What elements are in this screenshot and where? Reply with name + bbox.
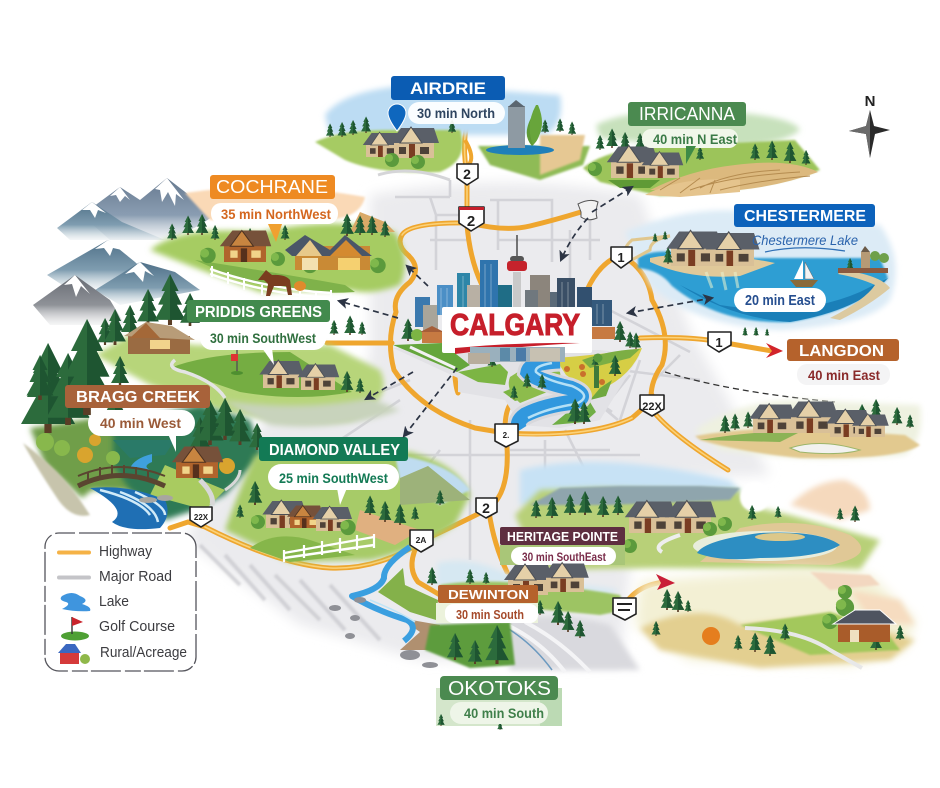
label: Langdon [787,339,899,361]
shield: 2 centre [495,424,518,447]
time: 30 min SouthEast [511,547,616,565]
shield: highway 1 east [708,332,731,352]
icon: horse [258,270,292,296]
time: 30 min South [436,603,538,623]
shield: unreadable [613,598,636,620]
Calgary banner [442,307,592,354]
shield: 2 south: 2 [482,500,490,516]
fence [210,266,332,300]
panel: Bragg Creek scene [21,319,265,529]
river and ground [329,547,640,672]
panel: Diamond Valley [225,437,470,562]
legend: lake: Lake [99,593,129,610]
time: 35 min NorthWest: 35 min NorthWest [221,207,331,222]
lake name: Chestermere Lake [752,232,858,248]
bridge [78,465,165,486]
shield: 22X west: 22X [194,513,209,522]
time: 30 min SouthWest [200,325,326,365]
shield: highway 1 east: 1 [715,335,723,350]
shield: highway 1 north [611,247,632,268]
shield: 2 centre: 2. [503,431,509,440]
label: Airdrie [391,76,505,100]
label: Irricanna: IRRICANNA [639,104,735,124]
lake scene [625,210,896,336]
hill scene [150,187,405,293]
icon: map pin [388,104,406,131]
road shields [190,164,731,620]
legend: major road: Major Road [99,568,172,585]
highways [170,125,772,600]
label: Airdrie: AIRDRIE [410,79,486,98]
legend: highway: Highway [99,543,152,560]
legend: golf course [61,617,175,640]
legend: rural: Rural/Acreage [100,644,187,661]
compass: N [865,93,875,110]
crop background [436,688,562,730]
scene [225,449,470,562]
legend [45,533,196,671]
legend: golf course: Golf Course [99,618,175,635]
small buildings [420,326,615,343]
time: 20 min East [734,288,826,312]
chicken/pony [294,281,306,291]
shield: 2A: 2A [416,535,426,545]
label: Okotoks: OKOTOKS [448,678,551,700]
time: 20 min East: 20 min East [745,293,815,309]
city centre: Calgary [393,235,642,430]
sky and scene [315,85,590,180]
shield: highway 2: 2 [467,213,475,230]
panel: Cochrane [33,175,405,325]
panel: Bragg Creek forest and Priddis [21,274,400,529]
arrow: to Langdon [766,343,783,358]
time: 30 min North [408,102,505,124]
panel: Langdon [665,339,921,459]
shield: 22X east [640,395,664,416]
label: Chestermere: CHESTERMERE [744,208,866,225]
shield: highway 1 north: 1 [617,250,625,265]
panel: southeast rural scene [635,568,915,668]
orange tree [702,627,720,645]
compass [849,93,890,158]
shield: highway 2 north: 2 [463,166,471,182]
scene [583,110,820,197]
label: Langdon: LANGDON [799,343,884,360]
time: 30 min SouthWest: 30 min SouthWest [210,331,316,346]
time: 40 min West: 40 min West [100,415,181,431]
dashed arrows [339,187,712,436]
panel: Airdrie [315,76,590,180]
house [833,610,896,642]
time: 40 min East [797,364,890,385]
shield: 2A [410,530,433,552]
dashed connector [665,372,835,402]
building strip [468,347,565,364]
panel: Priddis Greens scene [95,274,400,427]
panel: Dewinton [329,547,640,672]
label: Cochrane: COCHRANE [216,177,328,197]
label: Diamond Valley [259,437,408,461]
shield: 22X east: 22X [642,401,662,413]
panel: Okotoks [436,676,562,730]
panel: Irricanna [583,102,820,197]
Calgary Tower [507,235,527,310]
legend: highway [59,543,152,560]
label background crop [500,545,625,565]
time: 25 min SouthWest: 25 min SouthWest [279,470,388,486]
label: Diamond Valley: DIAMOND VALLEY [269,442,400,459]
panel: Heritage Pointe [500,462,880,570]
skyline [415,235,612,331]
time: 30 min North: 30 min North [417,105,495,121]
label: Heritage Pointe: HERITAGE POINTE [507,529,618,544]
legend: major road [59,568,172,585]
scene [695,399,921,459]
time: 25 min SouthWest [268,464,399,505]
scene [515,462,880,570]
icon: golf flag [231,350,243,375]
label: Chestermere [734,204,875,227]
shield: 2 south [476,498,497,518]
base map [185,180,770,665]
mountains [33,178,215,325]
label: Dewinton: DEWINTON [448,587,529,602]
shield: highway 2 [459,207,484,231]
time: 40 min N East: 40 min N East [653,132,737,147]
Calgary banner: CALGARY [450,307,580,342]
legend: lake [61,593,129,611]
time: 30 min South: 30 min South [456,608,524,622]
fence [284,534,374,562]
label: Priddis Greens: PRIDDIS GREENS [195,304,322,321]
shield: 22X west [190,507,212,527]
time: 40 min N East [642,129,738,164]
time: 30 min SouthEast: 30 min SouthEast [522,550,606,564]
shield: highway 2 north [457,164,478,185]
label: Bragg Creek [65,385,210,408]
panel: Chestermere [625,204,896,336]
legend: rural [58,644,187,664]
time: 40 min South: 40 min South [464,706,544,721]
central green park [393,318,642,430]
label: Dewinton [438,585,538,603]
label: Cochrane [210,175,335,199]
label: Bragg Creek: BRAGG CREEK [76,389,200,406]
time: 40 min East: 40 min East [808,368,880,383]
time: 40 min West [88,410,195,452]
red arrow [656,574,675,590]
time: 35 min NorthWest [211,203,338,242]
label: Irricanna [628,102,746,126]
